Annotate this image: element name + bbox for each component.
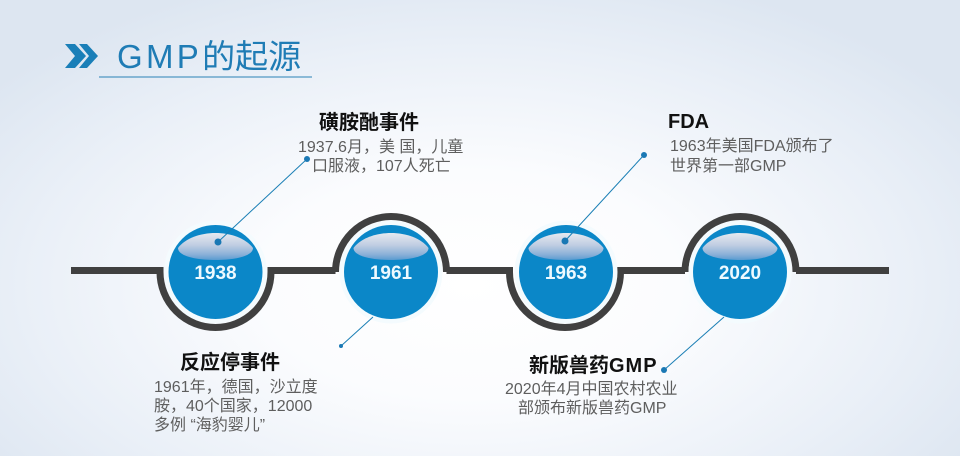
text block: 反应停事件	[154, 350, 318, 434]
text block: FDA: 1963年美国FDA颁布了	[670, 137, 834, 155]
title: GMP的起源	[117, 38, 301, 75]
leader line: 1938	[214, 156, 310, 246]
text block: 新版兽药GMP: 部颁布新版兽药GMP	[518, 399, 666, 417]
text block: FDA: 世界第一部GMP	[670, 157, 786, 175]
text block: 反应停事件: 反应停事件	[180, 350, 280, 374]
text block: FDA	[668, 111, 834, 175]
leader line: 2020	[661, 317, 724, 373]
node: 1938: 1938	[194, 263, 237, 284]
leader line: 1963	[562, 152, 647, 244]
text block: 反应停事件: 胺，40个国家，12000	[154, 397, 312, 415]
leader line: 1961	[339, 317, 373, 348]
text block: 新版兽药GMP: 新版兽药GMP	[529, 353, 658, 377]
node: 1961	[340, 220, 442, 324]
text block: FDA: FDA	[668, 111, 709, 133]
text block: 磺胺酏事件	[298, 111, 463, 175]
text block: 反应停事件: 多例 “海豹婴儿”	[154, 416, 265, 434]
node: 2020	[688, 220, 792, 324]
text block: 新版兽药GMP	[505, 353, 678, 417]
timeline track	[71, 216, 889, 328]
text block: 反应停事件: 1961年，德国，沙立度	[154, 378, 318, 396]
text block: 磺胺酏事件: 1937.6月，美 国，儿童	[298, 137, 463, 156]
node: 1938	[164, 220, 267, 324]
node: 1961: 1961	[370, 263, 413, 284]
node: 1963	[514, 220, 618, 324]
text block: 磺胺酏事件: 口服液，107人死亡	[312, 157, 451, 175]
node: 1963: 1963	[545, 263, 587, 284]
icon: double chevron	[65, 44, 98, 68]
text block: 新版兽药GMP: 2020年4月中国农村农业	[505, 380, 678, 398]
text block: 磺胺酏事件: 磺胺酏事件	[319, 111, 419, 134]
node: 2020: 2020	[719, 263, 761, 284]
